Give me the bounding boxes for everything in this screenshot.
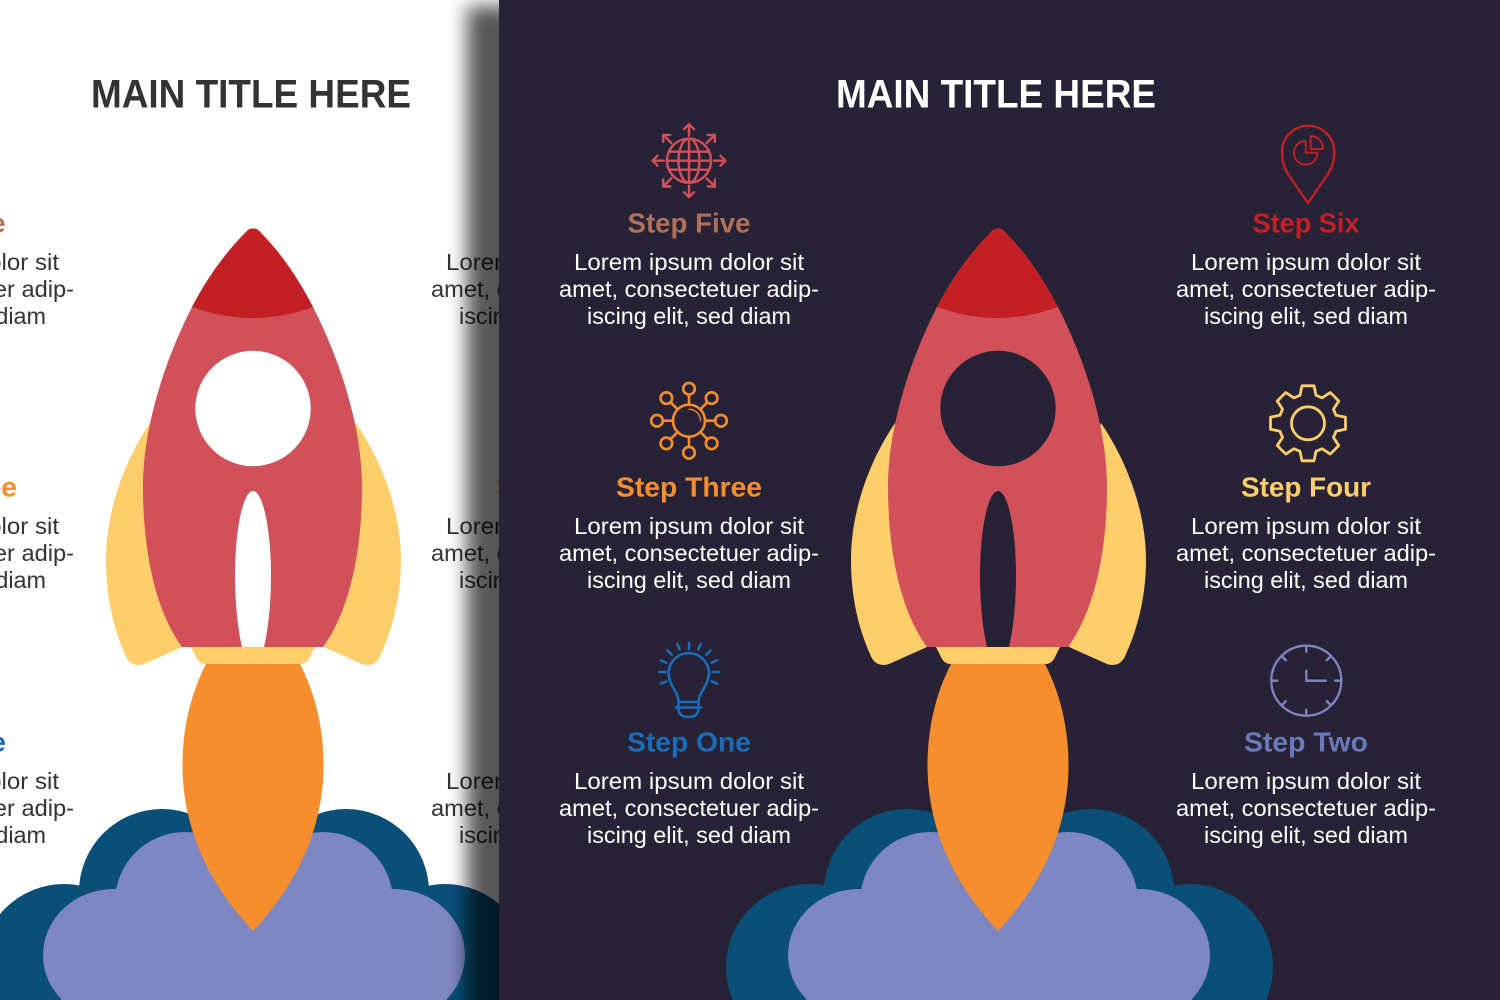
nozzle — [936, 647, 1060, 664]
cloud front — [788, 832, 1210, 1000]
light title: MAIN TITLE HERE — [91, 72, 411, 116]
step five text: Lorem ipsum dolor sit — [574, 249, 805, 275]
step four text: Step Four — [1241, 472, 1371, 502]
step three text: iscing elit, sed diam — [587, 567, 791, 593]
light nozzle — [191, 647, 315, 664]
cloud back — [726, 809, 1273, 1000]
light slot — [235, 491, 271, 647]
step three text: amet, consectetuer adip- — [559, 540, 819, 566]
step two text: iscing elit, sed diam — [1204, 822, 1408, 848]
light text: right column middle — [431, 472, 691, 593]
icon: light bulb — [659, 642, 719, 717]
icon: network hub — [651, 383, 727, 458]
step five text — [559, 208, 819, 329]
light window — [195, 351, 311, 466]
light text: right column middle: iscing elit, sed diam — [459, 567, 663, 593]
step one text: iscing elit, sed diam — [587, 822, 791, 848]
light text: step five — [0, 208, 74, 329]
step five text: iscing elit, sed diam — [587, 303, 791, 329]
step six text: amet, consectetuer adip- — [1176, 276, 1436, 302]
fins — [851, 423, 1146, 665]
dark panel background — [499, 0, 1500, 1000]
light rocket illustration — [0, 228, 528, 1000]
rocket body — [888, 228, 1107, 647]
light fins — [106, 423, 401, 665]
panel: dark version — [499, 0, 1500, 1000]
step six text — [1176, 208, 1436, 329]
light text: right column bottom: iscing elit, sed diam — [459, 822, 663, 848]
panel: light version — [0, 0, 691, 1000]
icon: gear — [1270, 386, 1346, 461]
light panel background — [0, 0, 520, 1000]
icon: globe with arrows — [652, 124, 726, 197]
light text: right column bottom — [431, 768, 691, 848]
dark rocket illustration — [726, 228, 1273, 1000]
step three text: Step Three — [616, 472, 762, 502]
light text: right column top: amet, consectetuer adip- — [431, 276, 691, 302]
step one text: amet, consectetuer adip- — [559, 795, 819, 821]
light text: right column top — [431, 249, 691, 329]
step one text: Step One — [627, 726, 751, 758]
light text: right column middle: Lorem ipsum dolor sit — [446, 513, 677, 539]
rocket window — [940, 351, 1056, 466]
step six text: Step Six — [1252, 208, 1360, 238]
step five text: amet, consectetuer adip- — [559, 276, 819, 302]
step four text: amet, consectetuer adip- — [1176, 540, 1436, 566]
rocket nose — [937, 228, 1058, 318]
step two text: amet, consectetuer adip- — [1176, 795, 1436, 821]
light cloud front — [43, 832, 465, 1000]
step three text — [559, 472, 819, 593]
light text: right column bottom: Lorem ipsum dolor sit — [446, 768, 677, 794]
step two text — [1176, 726, 1436, 848]
step three text: Lorem ipsum dolor sit — [574, 513, 805, 539]
step one text — [559, 726, 819, 848]
light text: step three — [0, 472, 74, 593]
light text: right column middle: Step Four — [496, 472, 626, 502]
light text: right column bottom: amet, consectetuer adip- — [431, 795, 691, 821]
flame — [928, 664, 1068, 931]
step two text: Lorem ipsum dolor sit — [1191, 768, 1422, 794]
icon: map pin with pie chart — [1282, 126, 1334, 203]
light text: step one — [0, 726, 74, 848]
step four text — [1176, 472, 1436, 593]
light text: right column top: iscing elit, sed diam — [459, 303, 663, 329]
step two text: Step Two — [1244, 726, 1368, 758]
light rocket nose — [192, 228, 313, 318]
step five text: Step Five — [628, 208, 750, 238]
drop shadow of dark panel — [467, 6, 537, 1000]
step four text: Lorem ipsum dolor sit — [1191, 513, 1422, 539]
step six text: Lorem ipsum dolor sit — [1191, 249, 1422, 275]
step one text: Lorem ipsum dolor sit — [574, 768, 805, 794]
dark title: MAIN TITLE HERE — [836, 72, 1156, 116]
icon: clock — [1271, 646, 1341, 716]
step four text: iscing elit, sed diam — [1204, 567, 1408, 593]
rocket slot — [980, 491, 1016, 647]
light text: right column top: Lorem ipsum dolor sit — [446, 249, 677, 275]
light cloud back — [0, 809, 528, 1000]
light flame — [182, 664, 324, 931]
step six text: iscing elit, sed diam — [1204, 303, 1408, 329]
light text: right column middle: amet, consectetuer adip- — [431, 540, 691, 566]
light rocket body — [143, 228, 362, 647]
